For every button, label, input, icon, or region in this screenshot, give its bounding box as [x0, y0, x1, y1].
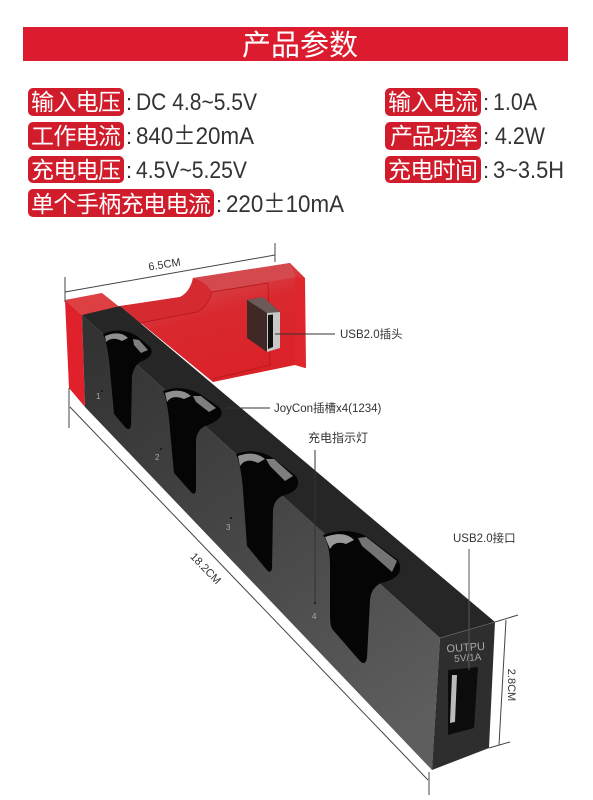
slot numbers and indicator lights: 1	[96, 392, 101, 401]
spec: working current	[28, 116, 254, 151]
USB 2.0 plug	[247, 297, 280, 352]
title bar	[23, 27, 568, 62]
callout: USB2.0 plug	[275, 327, 403, 341]
title bar: 产品参数	[242, 29, 358, 62]
spec: charging voltage: 充电电压	[31, 157, 121, 183]
USB 2.0 output port: 5V/1A	[454, 652, 482, 665]
callout: charging indicator: 充电指示灯	[308, 430, 368, 445]
callout: JoyCon slots: JoyCon插槽x4(1234)	[274, 401, 382, 415]
spec: input current: 输入电流	[388, 89, 478, 115]
Joy-Con slot 3	[236, 451, 298, 572]
spec: power: 4.2W	[495, 123, 545, 150]
dimension: 6.5CM	[65, 243, 275, 302]
spec: charging voltage	[28, 156, 247, 184]
callout: USB2.0 port	[453, 532, 516, 670]
spec: per controller charging current: :	[216, 192, 222, 217]
Joy-Con slot 2	[163, 388, 222, 494]
spec: charging time: :	[483, 158, 489, 183]
slot numbers and indicator lights: 2	[155, 453, 160, 462]
spec: input current: 1.0A	[493, 89, 537, 116]
spec: input voltage: 输入电压	[31, 89, 121, 115]
callout: USB2.0 plug: USB2.0插头	[340, 327, 403, 341]
spec: per controller charging current: 单个手柄充电电流	[31, 191, 211, 217]
slot numbers and indicator lights: 3	[226, 523, 231, 532]
Joy-Con slot 4	[323, 531, 400, 663]
dock front face	[82, 315, 440, 770]
dock end face	[432, 622, 495, 770]
Joy-Con slot 1	[103, 330, 152, 429]
black charging dock body	[82, 306, 495, 770]
slot numbers and indicator lights: 4	[312, 612, 317, 621]
spec: power: :	[483, 124, 489, 149]
spec: input current	[385, 88, 537, 116]
dimension: 6.5CM: 6.5CM	[148, 257, 181, 273]
spec: input current: :	[483, 90, 489, 115]
spec: charging voltage: :	[126, 158, 132, 183]
spec: input voltage	[28, 88, 257, 116]
spec: charging voltage: 4.5V~5.25V	[136, 157, 247, 184]
spec: charging time: 3~3.5H	[493, 157, 564, 184]
USB 2.0 output port: OUTPU	[446, 641, 485, 655]
spec: power	[385, 122, 545, 150]
spec: per controller charging current: 220±10mA	[226, 184, 344, 219]
dimension: 2.8CM: 2.8CM	[505, 669, 517, 701]
USB 2.0 output port	[446, 641, 485, 735]
spec: charging time	[385, 156, 564, 184]
dimension: 2.8CM	[489, 615, 518, 748]
spec: power: 产品功率	[390, 123, 478, 149]
red rear bracket	[65, 263, 306, 407]
spec: working current: 工作电流	[31, 123, 121, 149]
callout: USB2.0 port: USB2.0接口	[453, 532, 516, 545]
spec: input voltage: DC 4.8~5.5V	[136, 89, 257, 116]
spec: input voltage: :	[126, 90, 132, 115]
spec: charging time: 充电时间	[388, 157, 478, 183]
slot numbers and indicator lights	[96, 390, 317, 621]
spec: working current: 840±20mA	[136, 116, 254, 151]
dimension: 18.2CM: 18.2CM	[187, 551, 223, 587]
spec: working current: :	[126, 124, 132, 149]
dock top surface	[82, 306, 495, 638]
spec: per controller charging current	[28, 184, 344, 219]
